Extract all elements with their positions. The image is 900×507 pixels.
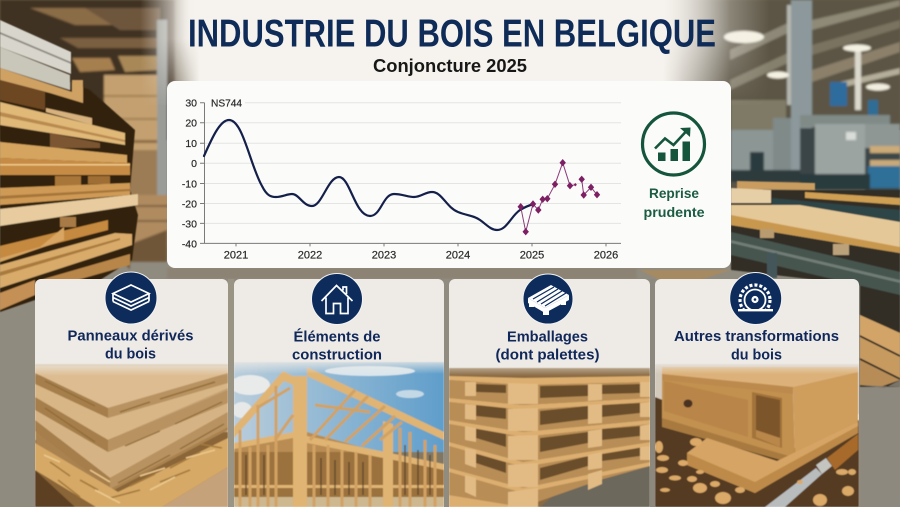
card label bbox=[68, 328, 194, 362]
line chart NS744: 30 bbox=[185, 98, 197, 110]
line chart NS744: 2023 bbox=[372, 250, 396, 262]
card label bbox=[674, 329, 839, 364]
line chart NS744: 2026 bbox=[594, 250, 618, 262]
photo: wooden box and chisel bbox=[655, 358, 859, 507]
icon: house bbox=[312, 274, 362, 324]
icon: layers bbox=[105, 272, 157, 324]
panel: chart card bbox=[167, 81, 731, 268]
line chart NS744: 2021 bbox=[224, 250, 248, 262]
panel: autres transformations bbox=[655, 272, 859, 507]
line chart NS744: 0 bbox=[191, 158, 197, 170]
photo: timber frame bbox=[230, 358, 444, 507]
photo: pallets bbox=[449, 358, 650, 507]
card label: construction bbox=[292, 348, 382, 364]
card label bbox=[496, 330, 600, 364]
subtitle: Conjoncture 2025 bbox=[373, 56, 527, 76]
panel: emballages bbox=[449, 274, 650, 507]
line chart NS744 bbox=[182, 98, 621, 262]
right factory bbox=[680, 0, 900, 193]
callout: reprise prudente: Reprise bbox=[649, 185, 699, 201]
card label: Panneaux dérivés bbox=[68, 328, 194, 344]
card label: Autres transformations bbox=[674, 329, 839, 345]
card label bbox=[292, 328, 382, 364]
card label: du bois bbox=[731, 348, 782, 364]
line chart NS744: -40 bbox=[182, 238, 197, 250]
left lumber stack bbox=[0, 20, 138, 312]
line chart NS744: -30 bbox=[182, 218, 197, 230]
card label: Éléments de bbox=[294, 328, 380, 346]
icon: growth trend bbox=[642, 113, 704, 175]
title: INDUSTRIE DU BOIS EN BELGIQUE bbox=[188, 12, 716, 56]
callout: reprise prudente bbox=[644, 185, 705, 220]
card label: du bois bbox=[105, 346, 156, 362]
line chart NS744: 10 bbox=[185, 138, 197, 150]
fog behind title bbox=[140, 0, 770, 105]
photo: stacked panels bbox=[35, 360, 228, 507]
line chart NS744: 2025 bbox=[520, 250, 544, 262]
floor strips bbox=[167, 268, 637, 279]
icon: saw blade bbox=[730, 272, 782, 324]
line chart NS744: NS744 bbox=[211, 98, 242, 110]
card label: Emballages bbox=[507, 330, 588, 346]
line chart NS744: -20 bbox=[182, 198, 197, 210]
card label: (dont palettes) bbox=[496, 348, 600, 364]
panel: éléments de construction bbox=[230, 274, 444, 507]
icon: pallet bbox=[523, 274, 573, 324]
line chart NS744: 2024 bbox=[446, 250, 470, 262]
left warehouse ceiling and back wall bbox=[0, 0, 175, 282]
right conveyor and planks bbox=[640, 181, 900, 507]
line chart NS744: 2022 bbox=[298, 250, 322, 262]
line chart NS744: -10 bbox=[182, 178, 197, 190]
callout: reprise prudente: prudente bbox=[644, 204, 705, 220]
panel: panneaux dérivés du bois bbox=[35, 272, 228, 507]
pallet rows bbox=[449, 380, 650, 507]
line chart NS744: 20 bbox=[185, 118, 197, 130]
